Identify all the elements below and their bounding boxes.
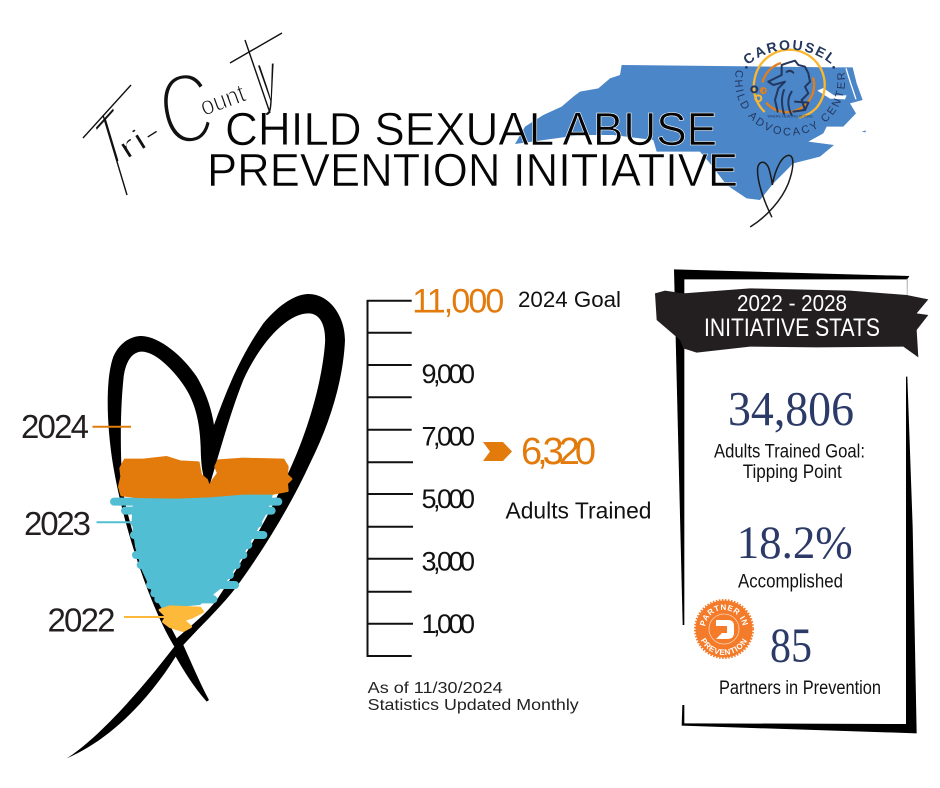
script title: Tri-County	[83, 33, 282, 195]
fill: 2022	[160, 607, 203, 631]
year label: 2022: 2022	[48, 602, 116, 639]
scale labels: 5,000	[422, 484, 475, 514]
stat: partners: Partners in Prevention	[719, 678, 881, 699]
title: CHILD SEXUAL ABUSE	[225, 103, 717, 155]
logo rings	[751, 50, 825, 117]
scale labels: 3,000	[422, 547, 475, 577]
footnote	[368, 680, 579, 714]
arrow: current value marker	[483, 442, 512, 461]
scale labels: 1,000	[422, 609, 475, 639]
heart ribbon outline	[67, 294, 345, 758]
script title: Tri-County: C	[150, 50, 221, 168]
script title: Tri-County: ount	[196, 77, 250, 122]
heart ribbon thermometer	[67, 294, 345, 758]
panel banner	[655, 288, 928, 357]
footnote: Statistics Updated Monthly	[368, 697, 579, 714]
goal label: 2024 Goal	[518, 287, 621, 312]
scale labels: 7,000	[422, 422, 475, 452]
title: PREVENTION INITIATIVE	[207, 144, 738, 196]
stat: goal: Tipping Point	[743, 462, 842, 483]
badge: Partner in Prevention: PARTNER IN	[700, 604, 748, 626]
scale axis	[367, 300, 413, 657]
stat: accomplished: 18.2%	[737, 517, 853, 569]
year label: 2023: 2023	[24, 505, 91, 542]
stat: accomplished	[737, 517, 853, 593]
logo name: CHILD ADVOCACY CENTER: CHILD ADVOCACY CENTER	[734, 70, 846, 136]
logo name: CAROUSEL: CAROUSEL	[744, 40, 832, 64]
badge: Partner in Prevention: PREVENTION	[700, 638, 747, 656]
stat: goal	[714, 381, 865, 483]
stat: partners: 85	[770, 618, 812, 673]
stat: goal: 34,806	[728, 381, 854, 436]
current value: 6,320	[521, 431, 596, 473]
current label: Adults Trained	[506, 498, 652, 524]
stat: accomplished: Accomplished	[738, 572, 843, 593]
icon: small ribbon heart	[751, 155, 793, 227]
stat: partners	[719, 618, 881, 699]
year label: 2023	[24, 505, 135, 542]
script title: Tri-County: T	[90, 91, 132, 188]
badge: Partner in Prevention	[694, 599, 754, 659]
goal value: 11,000	[412, 282, 504, 320]
scale labels: 9,000	[422, 359, 475, 389]
fill: 2023	[114, 493, 278, 608]
year label: 2024: 2024	[21, 408, 89, 445]
banner text: 2022 - 2028	[737, 290, 847, 316]
panel frame	[674, 269, 917, 733]
logo seahorse	[768, 61, 810, 115]
scale labels	[422, 359, 475, 639]
panel: initiative stats	[655, 269, 928, 734]
year label: 2022	[48, 602, 170, 639]
footnote: As of 11/30/2024	[368, 680, 503, 697]
year label: 2024	[21, 408, 131, 445]
logo: Carousel Child Advocacy Center	[734, 40, 846, 136]
stat: goal: Adults Trained Goal:	[714, 442, 865, 463]
banner text: INITIATIVE STATS	[704, 314, 880, 342]
map: North Carolina	[515, 65, 866, 200]
fill: 2024	[119, 457, 291, 497]
script title: Tri-County: ri-	[112, 115, 167, 166]
title	[207, 103, 738, 196]
logo tagline: WHERE HEALING BEGINS	[767, 114, 813, 119]
script title: Tri-County: y	[253, 36, 282, 118]
banner text	[704, 290, 880, 342]
